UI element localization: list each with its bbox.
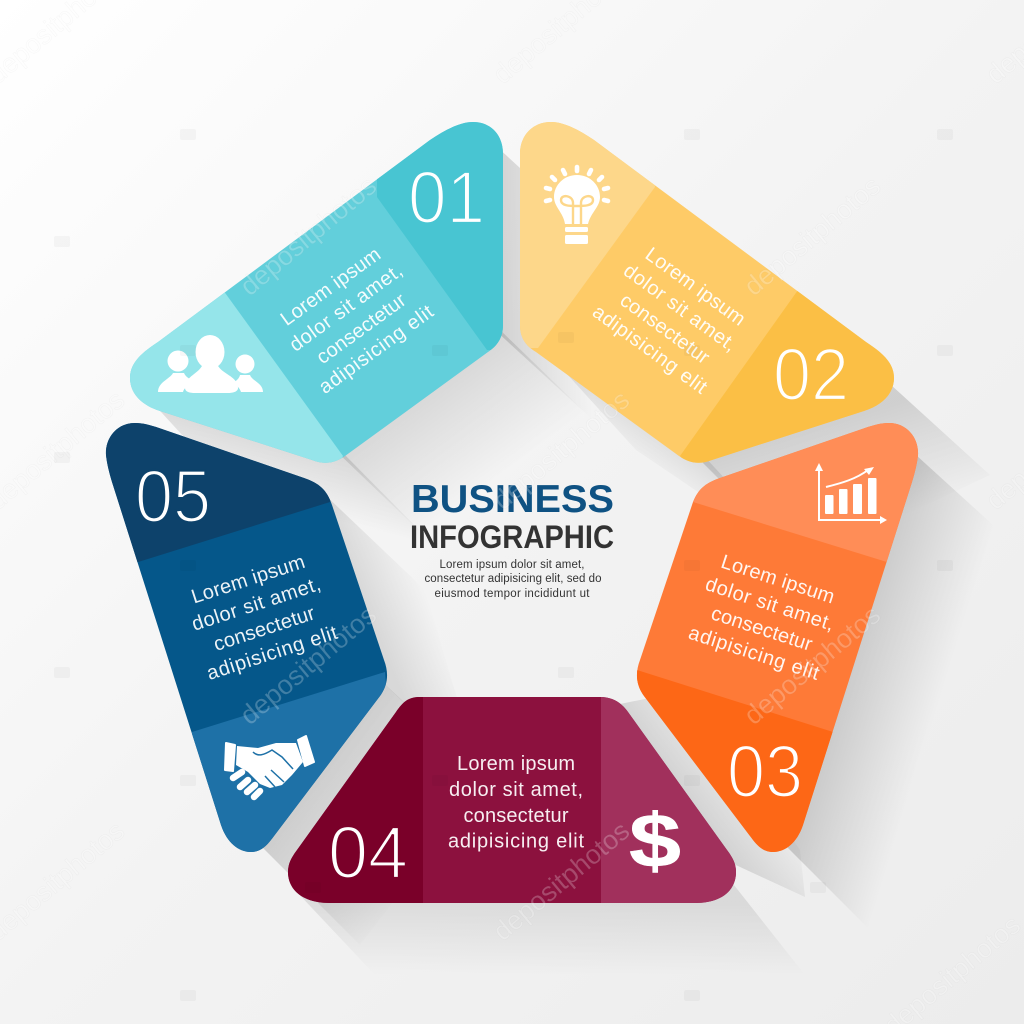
text: panel 05 (180, 548, 341, 685)
text: panel 03: Lorem ipsum (718, 551, 837, 608)
description: Lorem ipsum dolor sit amet, (440, 559, 584, 571)
icon: bar chart (815, 463, 887, 524)
text: panel 02: Lorem ipsum (641, 243, 749, 331)
long shadows (150, 145, 1015, 975)
description: consectetur adipisicing elit, sed do (424, 573, 602, 585)
description: eiusmod tempor incididunt ut (434, 588, 590, 600)
panel 03: orange (630, 415, 930, 860)
watermark: depositphotos (738, 171, 886, 302)
text: panel 03: dolor sit amet, (703, 573, 837, 636)
text: panel 05: Lorem ipsum (189, 551, 308, 608)
icon: light bulb (546, 167, 608, 244)
watermark: depositphotos (234, 600, 382, 731)
text: panel 05: consectetur (211, 602, 318, 656)
watermark: depositphotos (234, 171, 382, 302)
text: panel 01: dolor sit amet, (285, 260, 407, 356)
description (424, 559, 602, 600)
text: panel 01: consectetur (312, 289, 411, 369)
text: panel 04: Lorem ipsum (457, 753, 575, 775)
number 01: 01 (408, 156, 485, 239)
icon: dollar: $ (629, 799, 681, 884)
number 05: 05 (135, 455, 211, 538)
heading: business: BUSINESS (411, 478, 614, 521)
icon: people (158, 335, 263, 393)
text: panel 04: dolor sit amet, (449, 779, 583, 801)
icon: handshake (225, 736, 314, 797)
text: panel 02: consectetur (616, 289, 714, 369)
panel 02: yellow (520, 122, 894, 463)
number 02: 02 (773, 333, 849, 416)
watermark: depositphotos (487, 385, 635, 516)
text: panel 01: adipisicing elit (315, 301, 438, 399)
text: panel 02 (588, 238, 757, 399)
text: panel 05: adipisicing elit (204, 622, 341, 685)
panel 01: teal (130, 122, 503, 463)
panel 05: blue (106, 423, 388, 852)
text: panel 05: dolor sit amet, (189, 573, 323, 636)
watermark: depositphotos (738, 600, 886, 731)
text: panel 03: adipisicing elit (686, 622, 822, 685)
text: panel 02: adipisicing elit (588, 301, 711, 399)
watermark: depositphotos (487, 816, 635, 947)
text: panel 04: adipisicing elit (448, 830, 584, 852)
center title (410, 478, 614, 600)
heading: infographic: INFOGRAPHIC (410, 519, 614, 555)
number 04: 04 (328, 811, 408, 894)
text: panel 02: dolor sit amet, (619, 260, 741, 356)
text: panel 04 (448, 753, 584, 852)
text: panel 01 (269, 238, 438, 399)
text: panel 03 (686, 548, 846, 685)
text: panel 01: Lorem ipsum (277, 243, 385, 331)
text: panel 03: consectetur (708, 602, 815, 656)
panel 04: maroon (288, 697, 736, 903)
text: panel 04: consectetur (464, 805, 569, 827)
number 03: 03 (727, 730, 803, 813)
